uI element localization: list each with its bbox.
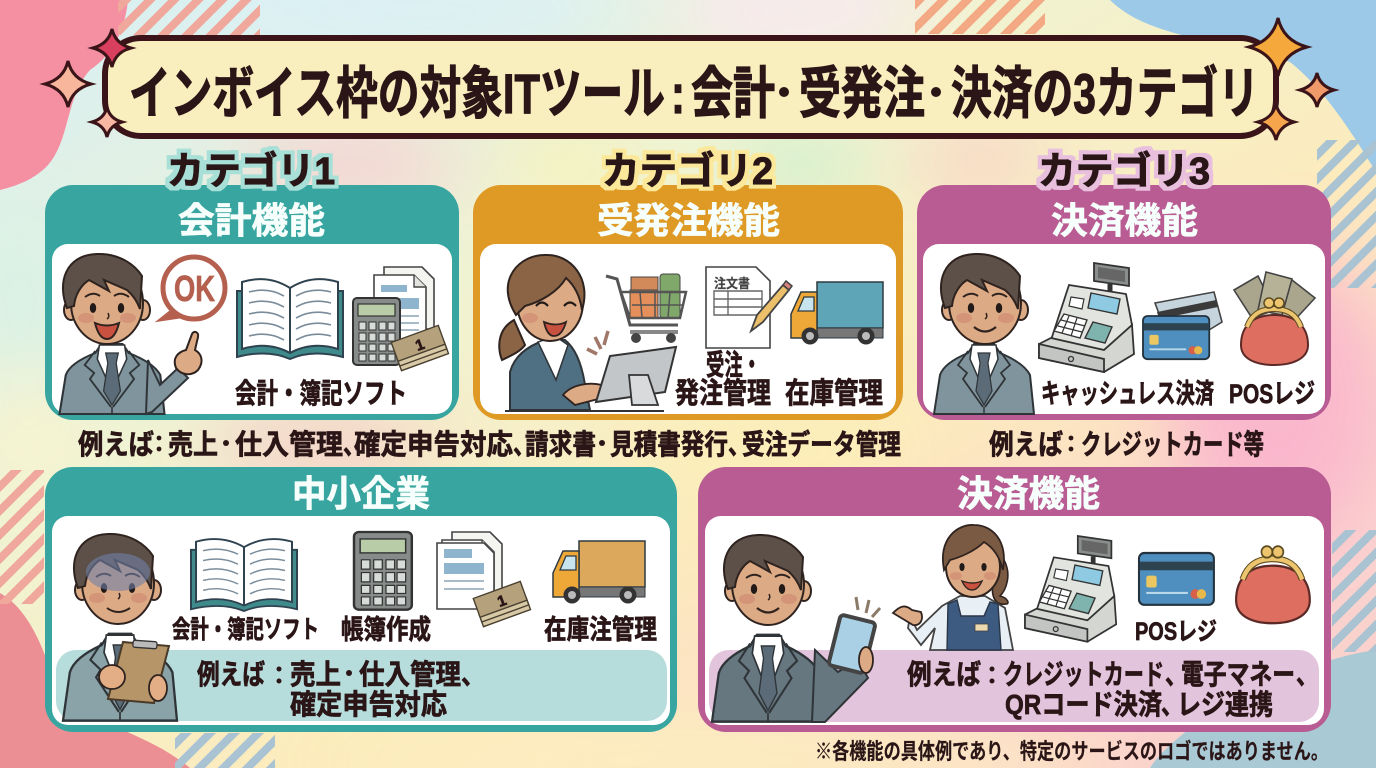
example text: categories 1 and 2: 受注データ管理 <box>742 428 901 460</box>
title text <box>129 62 1259 125</box>
example text: categories 1 and 2: 、 <box>728 429 750 460</box>
panel: small business <box>45 467 677 732</box>
icon: credit cards <box>1143 292 1222 359</box>
example text: レジ連携 <box>1177 689 1273 720</box>
icon: woman at computer <box>499 255 676 411</box>
label: キャッシュレス決済 <box>1041 379 1214 409</box>
sparkles <box>45 18 1334 140</box>
title text: : <box>671 62 685 125</box>
icon: banknotes <box>391 325 449 371</box>
example text <box>907 659 1318 720</box>
example text <box>197 659 485 720</box>
icon: OK bubble: OK <box>174 268 215 309</box>
category 2 label: カテゴリ2 <box>602 151 773 193</box>
example text: categories 1 and 2: 見積書発行 <box>610 429 728 460</box>
example text: 例えば <box>907 659 981 690</box>
label: 受注・ <box>706 349 761 382</box>
icon: man with tablet <box>712 535 880 722</box>
example text: 例えば <box>197 659 265 690</box>
title text: 会計 <box>691 62 775 125</box>
icon: truck <box>791 282 883 344</box>
example text: 、 <box>1161 689 1183 720</box>
example text: category 3: クレジットカード等 <box>1081 429 1264 460</box>
example text: 売上 <box>290 659 341 690</box>
icon: purse with money <box>1234 272 1315 365</box>
label: 発注管理 <box>675 377 771 410</box>
icon: ledger book <box>191 539 297 611</box>
example text: categories 1 and 2: 売上 <box>168 429 218 460</box>
icon: documents with money <box>437 532 531 627</box>
label: 会計・簿記ソフト <box>235 378 407 409</box>
icon: ledger book <box>237 279 343 359</box>
icon: shopping cart <box>606 274 686 343</box>
panel: ordering <box>473 185 903 420</box>
example text: categories 1 and 2: 仕入管理 <box>235 429 343 460</box>
panel: accounting <box>45 185 459 420</box>
example text: categories 1 and 2 <box>78 428 901 460</box>
icon: worried man with clipboard <box>63 534 177 721</box>
label: 会計・簿記ソフト <box>172 616 319 644</box>
example text: categories 1 and 2: 請求書 <box>525 429 596 460</box>
category 1 label: カテゴリ1 <box>167 151 335 193</box>
panel heading: 会計機能 <box>178 200 325 241</box>
icon: purse <box>1236 546 1310 623</box>
panel heading: 中小企業 <box>292 473 430 514</box>
example text: 、 <box>1296 659 1318 690</box>
panel heading: 決済機能 <box>1051 200 1198 241</box>
title banner <box>105 38 1276 136</box>
example text: クレジットカード <box>1003 659 1164 690</box>
example text: QRコード決済 <box>1005 689 1162 720</box>
example text: categories 1 and 2: 、 <box>513 429 535 460</box>
example text: 、 <box>461 659 485 690</box>
title text: 決済の3カテゴリ <box>951 62 1259 125</box>
icon: man pointing <box>60 254 202 414</box>
title text: インボイス枠の対象ITツール <box>129 62 665 125</box>
title text: 受発注 <box>799 62 925 125</box>
icon: shop clerk woman <box>893 525 1013 650</box>
example text: 仕入管理 <box>359 659 461 690</box>
label: 在庫管理 <box>785 377 883 410</box>
panel heading: 受発注機能 <box>597 200 780 241</box>
example text: category 3: 例えば <box>989 429 1063 460</box>
icon: credit card <box>1139 553 1214 605</box>
label: 在庫注管理 <box>544 615 657 645</box>
label: POSレジ <box>1229 379 1315 409</box>
panel: payment <box>917 185 1331 420</box>
panel heading: 決済機能 <box>957 473 1100 514</box>
icon: man <box>934 254 1034 414</box>
icon: cash register <box>1025 536 1116 642</box>
icon: cash register <box>1039 263 1134 372</box>
example background <box>709 650 1319 722</box>
icon: order form <box>706 267 792 348</box>
label: 帳簿作成 <box>341 615 431 645</box>
example text: categories 1 and 2: 確定申告対応 <box>354 429 513 460</box>
category 3 label: カテゴリ3 <box>1038 151 1210 193</box>
icon: calculator <box>354 532 412 610</box>
example text: 電子マネー <box>1181 659 1295 690</box>
icon: calculator <box>353 298 400 365</box>
icon: truck <box>553 541 645 604</box>
icon: documents <box>374 267 434 341</box>
icon: order form: 注文書 <box>714 276 750 291</box>
example text: categories 1 and 2: 、 <box>343 429 365 460</box>
icon: OK bubble <box>160 257 225 320</box>
example text: 、 <box>1165 659 1187 690</box>
example text: 確定申告対応 <box>290 689 447 720</box>
example background <box>56 650 667 721</box>
label: POSレジ <box>1135 618 1217 646</box>
example text: category 3 <box>989 429 1264 460</box>
panel: payment functions <box>698 467 1331 732</box>
example text: categories 1 and 2: 例えば <box>78 429 154 460</box>
